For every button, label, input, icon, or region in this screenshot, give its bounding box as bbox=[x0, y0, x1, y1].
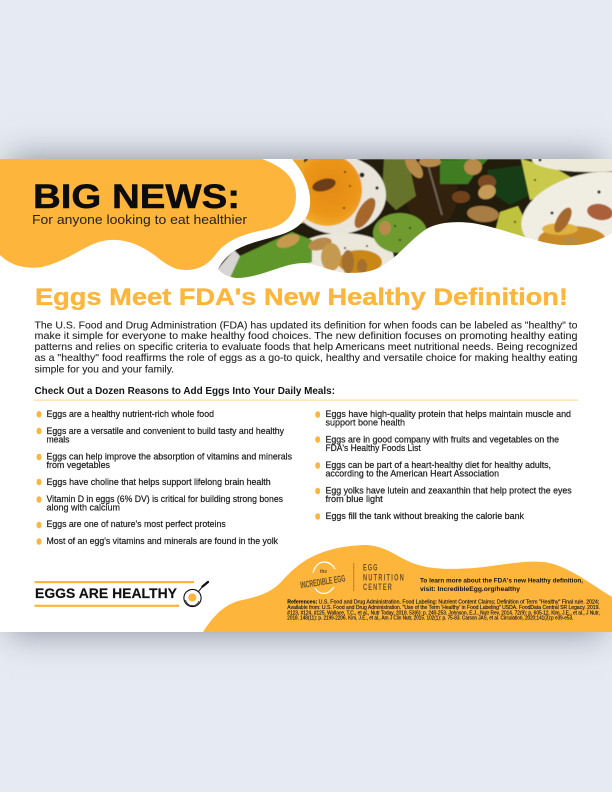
logo: Egg Nutrition Center: NUTRITION bbox=[363, 572, 405, 583]
list heading: Check Out a Dozen Reasons to Add Eggs Into Your Daily Meals: bbox=[34, 386, 335, 397]
reason 8: support bone health bbox=[326, 418, 405, 428]
logo: The Incredible Egg bbox=[300, 562, 346, 594]
logo: The Incredible Egg: INCREDIBLE EGG bbox=[300, 573, 346, 591]
logo: Egg Nutrition Center: EGG bbox=[363, 562, 379, 573]
logo: The Incredible Egg: the bbox=[320, 569, 327, 575]
subheading: For anyone looking to eat healthier bbox=[32, 212, 248, 227]
reason 2 bbox=[36, 426, 284, 444]
reason 3: Eggs can help improve the absorption of vitamins and minerals bbox=[46, 452, 292, 462]
call to action: To learn more about the FDA's new Healthy definition, bbox=[420, 578, 583, 585]
top yellow wave banner bbox=[0, 159, 296, 270]
reason 5 bbox=[36, 494, 283, 512]
reason 7: Most of an egg's vitamins and minerals are found in the yolk bbox=[46, 536, 278, 546]
logo: Egg Nutrition Center: CENTER bbox=[363, 582, 393, 592]
icon: frying pan with egg bbox=[184, 582, 208, 607]
reason 11: Egg yolks have lutein and zeaxanthin that help protect the eyes bbox=[326, 486, 572, 496]
reason 10: Eggs can be part of a heart-healthy diet for healthy adults, bbox=[326, 460, 551, 470]
reason 2: Eggs are a versatile and convenient to build tasty and healthy bbox=[46, 426, 284, 436]
reason 2: meals bbox=[46, 434, 70, 444]
food photo: eggs, avocado and pine nuts bbox=[218, 159, 612, 278]
reason 5: Vitamin D in eggs (6% DV) is critical for building strong bones bbox=[46, 494, 283, 504]
card shadow bbox=[14, 161, 598, 630]
reason 5: along with calcium bbox=[46, 502, 120, 512]
references: 2018. 148(11): p. 2199-2206. Kim, J.E., et al., Am J Clin Nutr, 2015. 102(1): p. 75-83. Carson JAS, et al. Circulation, 2020;141(3):p e39-e53. bbox=[287, 616, 573, 622]
left reasons list bbox=[36, 409, 292, 546]
intro paragraph bbox=[34, 320, 578, 375]
title: Eggs Meet FDA's New Healthy Definition! bbox=[35, 284, 568, 311]
reason 3: from vegetables bbox=[46, 460, 110, 470]
references bbox=[287, 600, 600, 622]
call to action: visit: IncredibleEgg.org/healthy bbox=[420, 586, 520, 593]
logo: Egg Nutrition Center bbox=[363, 562, 405, 592]
references: Available from: U.S. Food and Drug Administration. "Use of the Term 'Healthy' in Food Labeling" USDA. FoodData Central SR Legacy. 2019. bbox=[287, 605, 600, 611]
eggs are healthy tagline: EGGS ARE HEALTHY bbox=[35, 585, 178, 601]
intro paragraph: The U.S. Food and Drug Administration (FDA) has updated its definition for when foods can be labeled as "healthy" to bbox=[34, 320, 578, 331]
reason 8: Eggs have high-quality protein that helps maintain muscle and bbox=[326, 409, 571, 419]
reason 8 bbox=[315, 409, 571, 428]
bottom yellow wave bbox=[203, 545, 612, 632]
reason 9 bbox=[315, 434, 559, 453]
reason 12: Eggs fill the tank without breaking the calorie bank bbox=[326, 511, 524, 521]
intro paragraph: patterns and relies on specific criteria to evaluate foods that help Americans meet nutritional needs. Being recognized bbox=[34, 342, 578, 353]
reason 9: FDA's Healthy Foods List bbox=[326, 443, 421, 453]
intro paragraph: as a "healthy" food reaffirms the role of eggs as a go-to quick, healthy and versatile choice for making healthy eating bbox=[34, 353, 578, 364]
reason 6: Eggs are one of nature's most perfect proteins bbox=[46, 519, 226, 529]
reason 3 bbox=[36, 452, 292, 470]
intro paragraph: make it simple for everyone to make healthy food choices. The new definition focuses on promoting healthy eating bbox=[34, 331, 578, 342]
reason 10 bbox=[315, 460, 551, 478]
reason 10: according to the American Heart Association bbox=[326, 468, 499, 478]
references: References: U.S. Food and Drug Administration. Food Labeling: Nutrient Content Claims; Definition of Term "Healthy" Final rule. 2024; bbox=[287, 600, 599, 606]
references: #123, #124, #125. Wallace, T.C., et al., Nutr Today, 2018. 53(6): p. 240-253. Johnson, E.J., Nutr Rev, 2014. 72(9): p. 605-12. Kim, J.E., et al., J Nutr, bbox=[287, 610, 600, 616]
reason 1: Eggs are a healthy nutrient-rich whole food bbox=[46, 409, 214, 419]
infographic card bbox=[0, 159, 612, 632]
reason 11 bbox=[315, 486, 572, 504]
call to action bbox=[420, 578, 583, 593]
reason 4: Eggs have choline that helps support lifelong brain health bbox=[46, 477, 271, 487]
intro paragraph: simple for you and your family. bbox=[34, 364, 174, 375]
right reasons list bbox=[315, 409, 572, 521]
heading: BIG NEWS: BIG NEWS: bbox=[33, 178, 240, 216]
reason 9: Eggs are in good company with fruits and vegetables on the bbox=[326, 434, 559, 444]
reason 11: from blue light bbox=[326, 494, 383, 504]
white card background bbox=[0, 159, 612, 632]
